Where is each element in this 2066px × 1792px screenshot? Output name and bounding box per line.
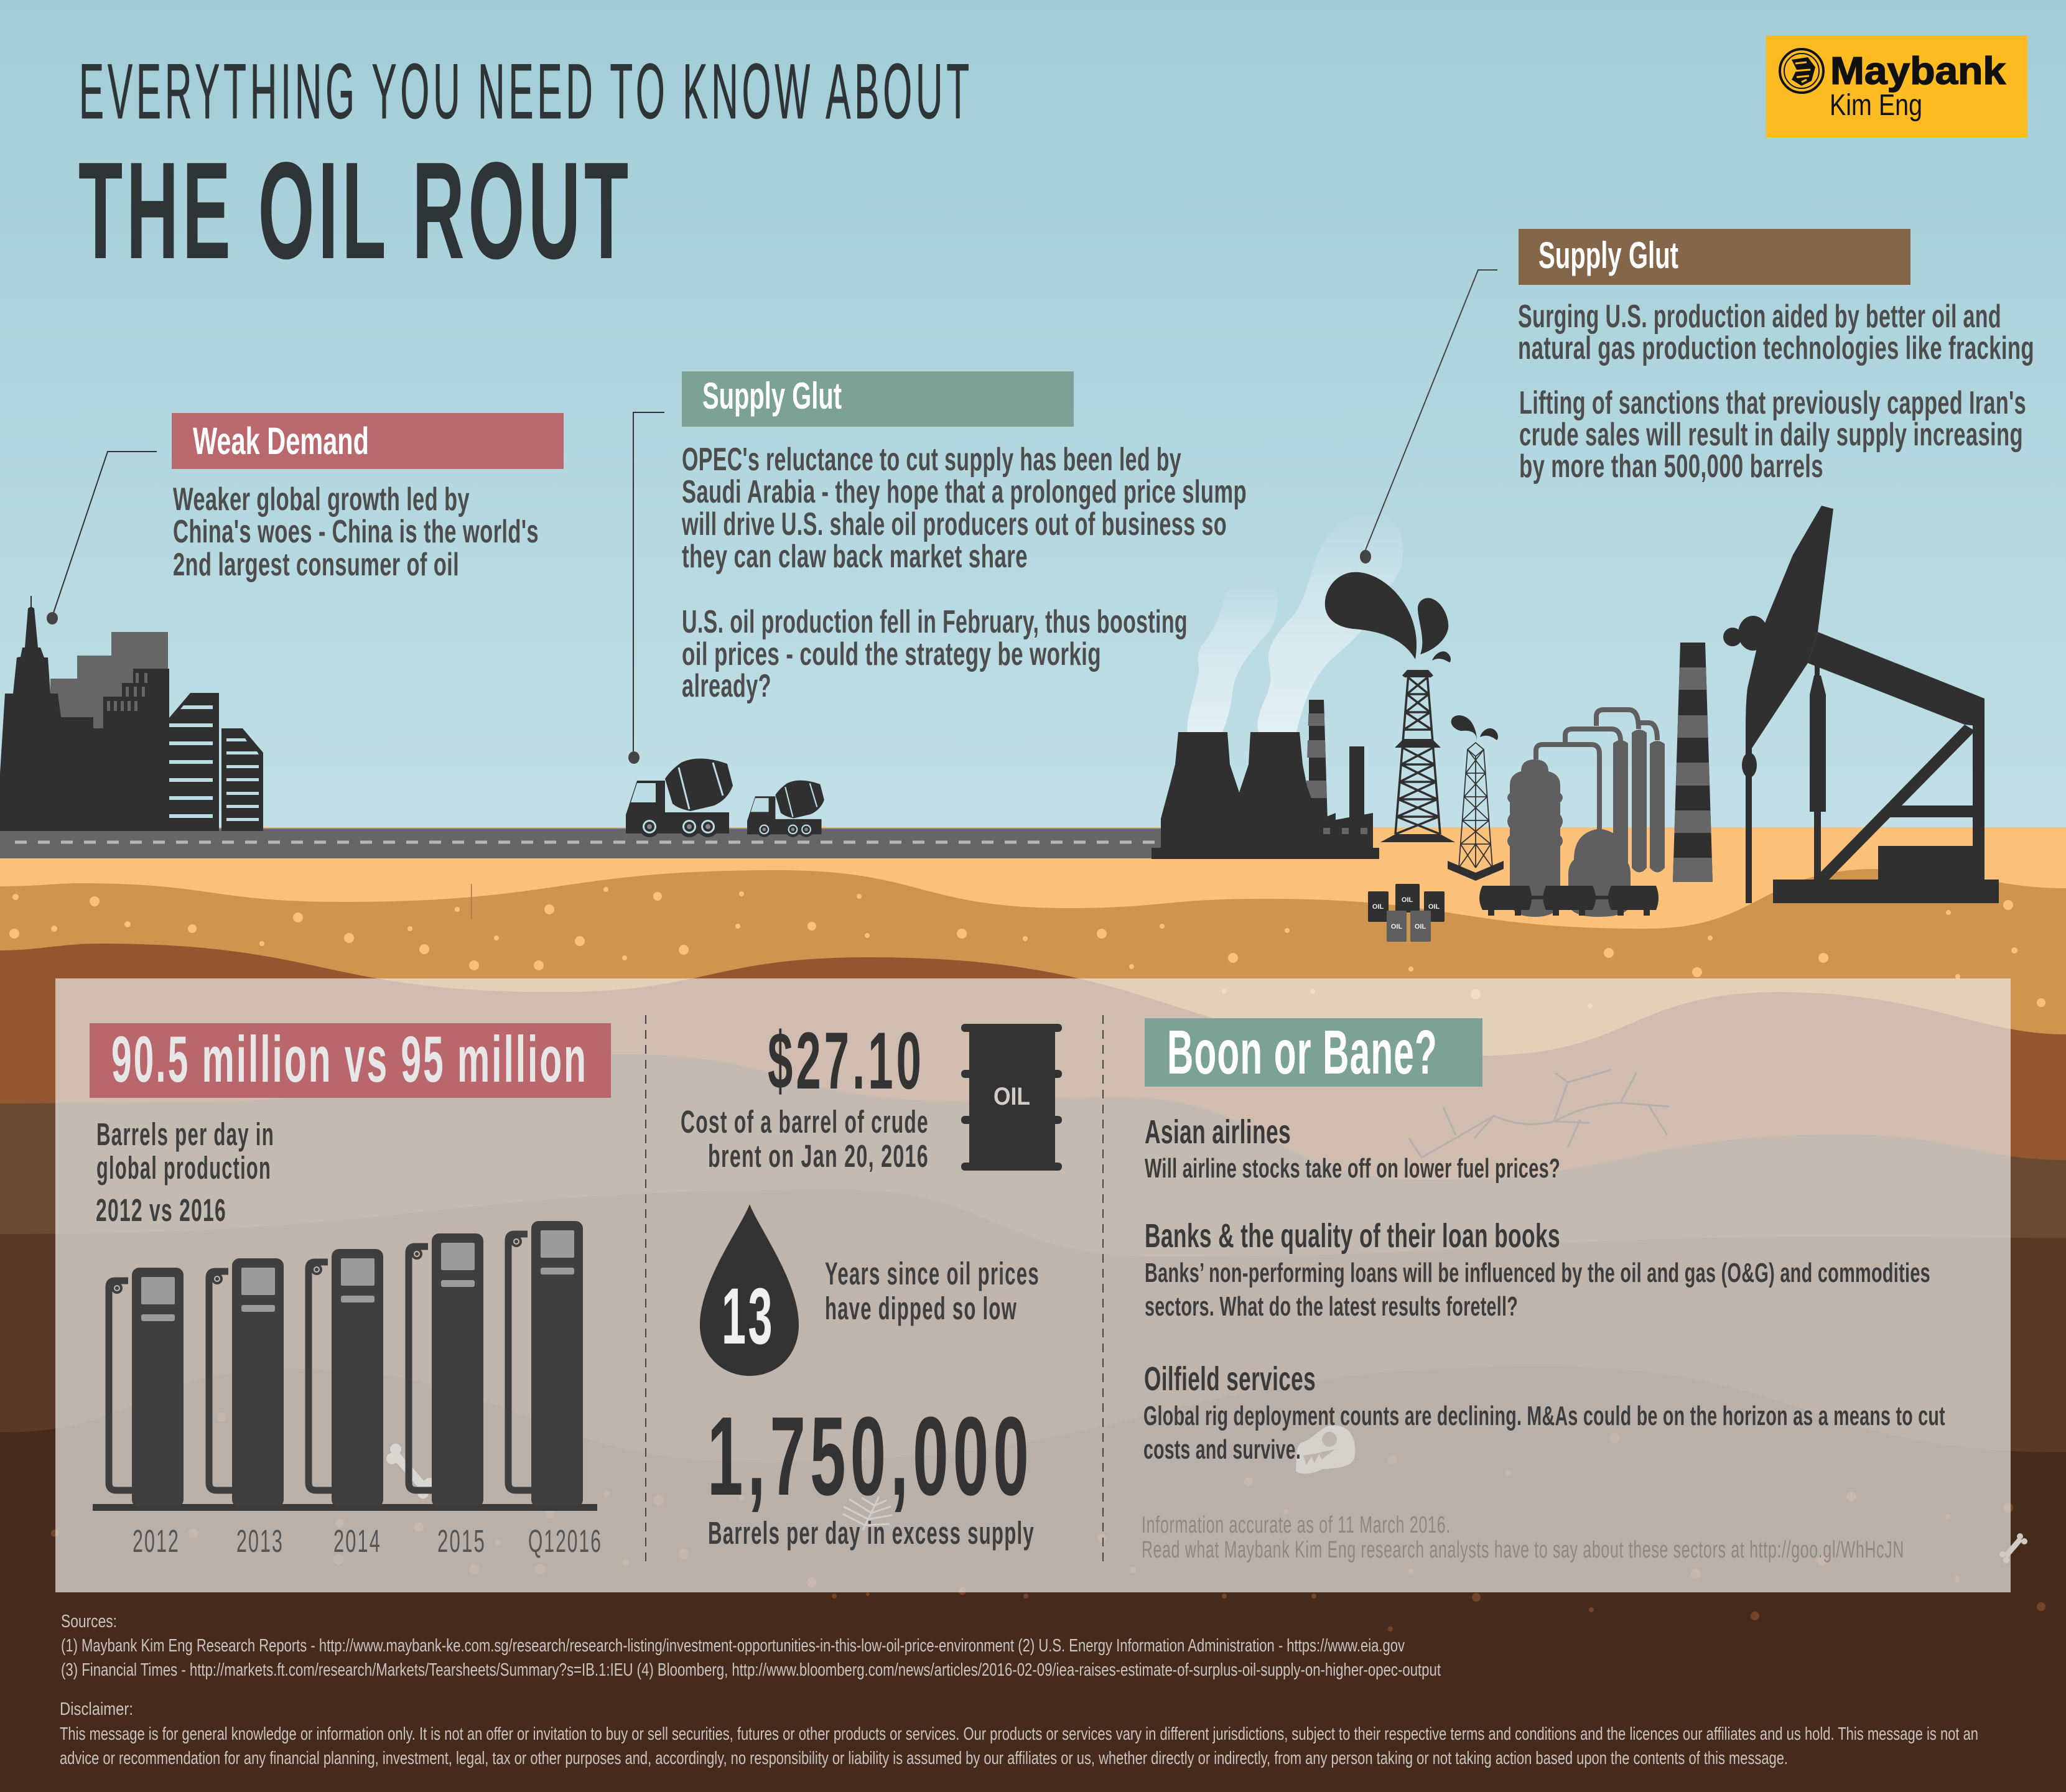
production description [96,1117,274,1228]
icon: small oil barrels: OIL [1372,903,1384,911]
sky background [0,0,2066,830]
note: accuracy: Information accurate as of 11 March 2016. [1142,1512,1451,1538]
callout: supply glut us [1360,229,2034,564]
sector: asian airlines [1145,1113,1560,1184]
callout: supply glut opec [628,371,1247,764]
chart: fuel pumps [93,1221,602,1559]
sector: banks: sectors. What do the latest results foretell? [1145,1291,1518,1322]
icon: small oil barrels: OIL [1402,896,1413,904]
stat: excess supply: Barrels per day in excess supply [708,1515,1035,1551]
chart axis labels: 2012 [133,1523,180,1559]
production description: global production [96,1150,271,1186]
callout: supply glut us: Supply Glut [1538,234,1678,276]
icon: small oil barrels: OIL [1415,923,1426,931]
icon: oil barrel: OIL [993,1083,1030,1110]
sector: oilfield services [1143,1360,1945,1465]
fossil: bone [386,1444,435,1498]
heading: production [90,1023,611,1098]
logo emblem [1780,49,1823,93]
icon: striped chimney [1673,643,1713,882]
sector: asian airlines: Asian airlines [1145,1113,1291,1151]
mid sand layer [0,869,2066,1792]
stat: barrel price: Cost of a barrel of crude [681,1104,929,1140]
production description: 2012 vs 2016 [96,1192,226,1228]
supply glut opec text: oil prices - could the strategy be workig [682,636,1101,672]
callout: supply glut opec: Supply Glut [702,375,842,417]
main title: THE OIL ROUT [78,134,632,288]
production description: Barrels per day in [96,1117,274,1152]
sector: oilfield services: Oilfield services [1144,1360,1316,1398]
chart axis labels: Q12016 [528,1523,602,1559]
fossil: skull [1296,1425,1355,1474]
deepest layer [0,1367,2066,1792]
stat: years since low: Years since oil prices [825,1256,1040,1291]
supply glut opec text: OPEC's reluctance to cut supply has been led by [682,442,1181,478]
sector: oilfield services: costs and survive. [1143,1434,1301,1465]
icon: small oil barrels: OIL [1391,923,1402,931]
stat: barrel price: brent on Jan 20, 2016 [708,1138,929,1174]
sources: Sources: [61,1612,117,1632]
icon: oil drop with 13 [700,1204,799,1376]
icon: oil splash [1325,572,1451,662]
decorative fossils [386,1070,2027,1563]
icon: small oil barrels: OIL [1428,903,1440,911]
supply glut opec text: already? [682,668,771,704]
callout: weak demand [47,413,564,624]
logo subbrand: Kim Eng [1830,89,1922,122]
supply glut us text: by more than 500,000 barrels [1519,448,1823,485]
sector: asian airlines: Will airline stocks take off on lower fuel prices? [1145,1153,1560,1184]
icon: oil derrick [1380,670,1455,842]
icon: oil drop with 13: 13 [722,1272,775,1361]
stat: barrel price: $27.10 [768,1015,924,1106]
stat: excess supply [707,1394,1035,1551]
stat: years since low: have dipped so low [825,1291,1017,1326]
weak demand text: 2nd largest consumer of oil [173,547,459,583]
weak demand text: China's woes - China is the world's [173,514,539,550]
pump 2014 [309,1249,383,1507]
panel: production [90,1023,611,1559]
supply glut opec text: U.S. oil production fell in February, thus boosting [682,604,1188,640]
supply glut us text [1518,299,2034,485]
brown layer [0,944,2066,1792]
stat: barrel price [681,1015,929,1174]
supply glut opec text: Saudi Arabia - they hope that a prolonged price slump [682,474,1247,510]
supply glut opec text: will drive U.S. shale oil producers out of business so [681,506,1227,542]
disclaimer [60,1699,1978,1768]
icon: lattice derrick [1448,715,1504,881]
heading: boon or bane [1145,1018,1482,1087]
sector: banks: Banks & the quality of their loan books [1145,1217,1560,1255]
weak demand text: Weaker global growth led by [173,481,470,518]
smoke plumes [1188,514,1403,732]
fossil: twig [1409,1070,1669,1158]
supply glut opec text: they can claw back market share [682,539,1028,575]
fossil: side bone [1999,1533,2027,1563]
icon: oil barrel [961,1024,1062,1171]
pump 2012 [109,1268,184,1507]
panel: price figures [681,1015,1062,1551]
sector: banks [1145,1217,1930,1322]
stat: excess supply: 1,750,000 [707,1394,1033,1519]
icon: large mixer truck [626,758,733,837]
road [0,828,1188,858]
dark umber layer [0,1189,2066,1792]
pump Q1 2016 [508,1221,583,1507]
stat: years since low [825,1256,1040,1326]
chart axis labels: 2013 [236,1523,284,1559]
pump 2015 [409,1233,483,1507]
sand surface [0,827,2066,1792]
note: accuracy [1142,1512,1904,1563]
deep layer dots [51,1413,2045,1632]
panel: boon or bane [1142,1018,1945,1563]
icon: small mixer truck [747,781,824,837]
disclaimer: Disclaimer: [60,1699,133,1719]
sources [61,1612,1441,1680]
icon: pumpjack [1723,506,1999,903]
sand dots [9,887,2045,1008]
pump 2013 [209,1258,284,1507]
chart axis labels [133,1523,602,1559]
icon: city skyline [0,596,263,831]
logo wordmark: Maybank [1830,50,2006,93]
logo [1766,35,2027,137]
heading: boon or bane: Boon or Bane? [1167,1018,1438,1087]
callout: weak demand: Weak Demand [193,420,369,462]
heading: production: 90.5 million vs 95 million [111,1023,588,1096]
icon: refinery [1479,710,1665,917]
icon: small oil barrels [1368,884,1445,942]
umber layer [0,1054,2066,1792]
chart axis labels: 2014 [333,1523,381,1559]
text: EVERYTHING YOU NEED TO KNOW ABOUT [79,49,973,135]
supply glut opec text [681,442,1247,704]
sources: (3) Financial Times - http://markets.ft.com/research/Markets/Tearsheets/Summary?s=IB.1:IEU (4) Bloomberg, http://www.bloomberg.com/news/articles/2016-02-09/iea-raises-estimate-of-surplus-oil-supply-on-higher-opec-output [61,1660,1441,1680]
translucent info panel [55,978,2011,1592]
ground layers [0,827,2066,1792]
weak demand text [173,481,539,583]
icon: cooling towers and factory [1152,700,1379,859]
sources: (1) Maybank Kim Eng Research Reports - http://www.maybank-ke.com.sg/research/research-listing/investment-opportunities-in-this-low-oil-price-environment (2) U.S. Energy Information Administration - https://www.eia.gov [61,1636,1405,1656]
chart axis labels: 2015 [437,1523,486,1559]
fossil: fern [843,1497,892,1530]
